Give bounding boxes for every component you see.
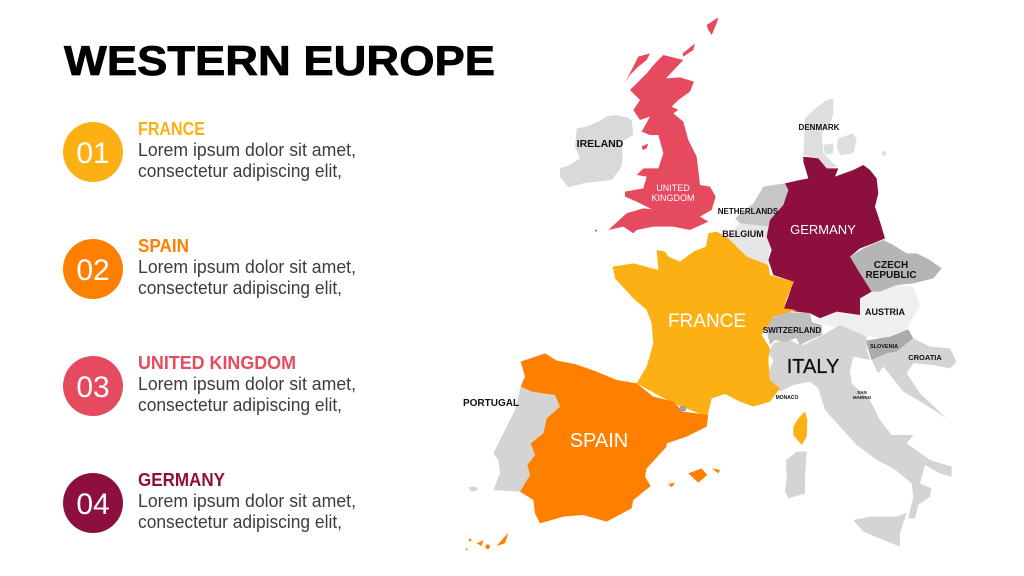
country labels: CZECH xyxy=(874,260,908,271)
country labels: MARINO xyxy=(853,395,872,400)
country labels: SAN xyxy=(857,390,867,395)
country labels: KINGDOM xyxy=(651,193,695,203)
list item 02: Spain: consectetur adipiscing elit, xyxy=(138,278,342,298)
country: Slovenia and Croatia xyxy=(866,329,957,418)
country labels: DENMARK xyxy=(799,123,840,132)
country: Denmark xyxy=(803,98,886,168)
country: Italy xyxy=(768,325,952,547)
list item 01: France: Lorem ipsum dolor sit amet, xyxy=(138,140,356,160)
country labels: NETHERLANDS xyxy=(718,207,779,216)
list item 01: France: consectetur adipiscing elit, xyxy=(138,161,342,181)
list item 04: Germany: GERMANY xyxy=(138,470,225,490)
list item 01: France xyxy=(63,119,356,182)
list item 03: United Kingdom: Lorem ipsum dolor sit amet, xyxy=(138,374,356,394)
country labels: IRELAND xyxy=(577,138,624,150)
country: United Kingdom xyxy=(595,17,718,233)
country: Austria xyxy=(812,285,920,338)
country: Ireland xyxy=(560,115,633,187)
country: Belgium xyxy=(727,223,770,265)
country labels: BELGIUM xyxy=(722,229,764,239)
list item 04: Germany: consectetur adipiscing elit, xyxy=(138,512,342,532)
country: France xyxy=(613,232,807,445)
list item 02: Spain: Lorem ipsum dolor sit amet, xyxy=(138,257,356,277)
country labels: SLOVENIA xyxy=(870,344,898,350)
list item 03: United Kingdom xyxy=(63,353,356,416)
country labels: FRANCE xyxy=(668,311,746,332)
country labels: MONACO xyxy=(776,395,798,401)
list item 04: Germany xyxy=(63,470,356,533)
country labels: GERMANY xyxy=(790,222,856,237)
country labels: AUSTRIA xyxy=(865,307,905,317)
list item 03: United Kingdom: consectetur adipiscing elit, xyxy=(138,395,342,415)
country labels: ITALY xyxy=(787,356,839,378)
country: Portugal xyxy=(468,387,560,492)
country: Czech Republic xyxy=(850,240,942,292)
country labels: SWITZERLAND xyxy=(763,326,821,335)
map of western europe xyxy=(466,17,957,550)
country: Netherlands xyxy=(735,183,788,227)
list item 04: Germany: Lorem ipsum dolor sit amet, xyxy=(138,491,356,511)
list item 02: Spain xyxy=(63,236,356,299)
list item 03: United Kingdom: UNITED KINGDOM xyxy=(138,353,296,373)
list item 02: Spain: SPAIN xyxy=(138,236,189,256)
country labels: PORTUGAL xyxy=(463,398,519,409)
list item 03: United Kingdom: 03 xyxy=(76,371,110,404)
country: Switzerland xyxy=(765,312,822,345)
list item 04: Germany: 04 xyxy=(76,488,110,521)
country: Spain xyxy=(466,353,720,550)
country labels xyxy=(463,123,942,452)
country labels: CROATIA xyxy=(908,353,942,362)
country labels: REPUBLIC xyxy=(865,270,917,281)
title: WESTERN EUROPE xyxy=(64,37,495,84)
list item 02: Spain: 02 xyxy=(76,254,110,287)
list item 01: France: 01 xyxy=(76,137,110,170)
country: Andorra xyxy=(680,406,686,411)
country labels: UNITED xyxy=(656,183,690,193)
country labels: SPAIN xyxy=(570,430,628,452)
country: Germany xyxy=(767,157,885,318)
list item 01: France: FRANCE xyxy=(138,119,205,139)
